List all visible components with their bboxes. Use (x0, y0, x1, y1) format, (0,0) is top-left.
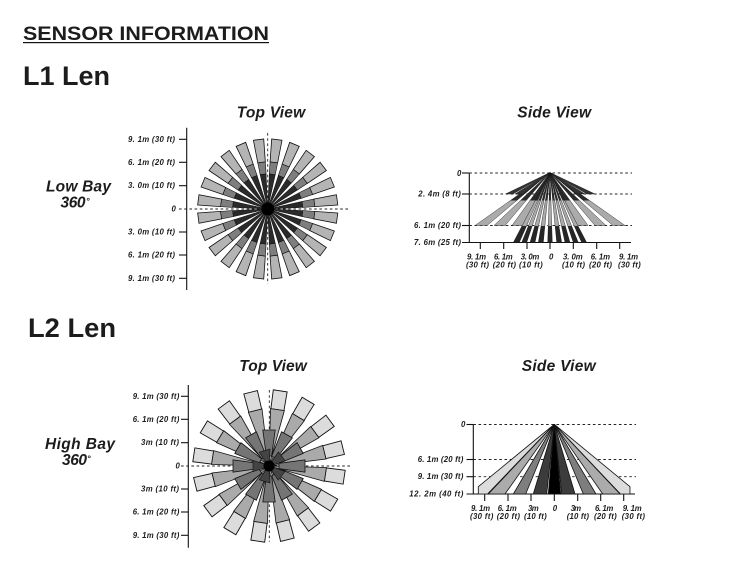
detection pattern: L2 top rays (193, 390, 345, 542)
axis: L1 side view scale: 3. 0m (563, 252, 583, 262)
axis: L1 side view scale: 9. 1m (619, 252, 638, 262)
axis: L1 side view scale: (10 ft) (562, 261, 585, 270)
axis: L2 side view scale (409, 420, 645, 521)
heading: L1 side view: Side View (517, 104, 592, 121)
axis: L1 side view scale: 2. 4m (8 ft) (417, 190, 461, 198)
axis: L1 side view scale: 7. 6m (25 ft) (414, 238, 461, 247)
axis: L2 top view scale: 3m (10 ft) (141, 438, 179, 447)
axis: L1 side view scale: (30 ft) (466, 261, 489, 270)
chart: L1 top view (128, 128, 349, 290)
axis: L1 side view scale: 6. 1m (494, 252, 513, 262)
axis: L2 top view scale: 3m (10 ft) (141, 484, 179, 494)
axis: L1 top view scale: 6. 1m (20 ft) (128, 158, 175, 167)
axis: L1 side view scale: (20 ft) (589, 261, 612, 270)
axis: L2 top view scale: 9. 1m (30 ft) (133, 392, 180, 401)
axis: L2 top view scale: 0 (176, 462, 180, 470)
label: High Bay 360 (45, 436, 116, 469)
axis: L2 side view scale: (10 ft) (524, 512, 547, 521)
chart: L2 side view (409, 420, 645, 521)
axis: L2 side view scale: 6. 1m (595, 504, 613, 513)
axis: L2 top view scale: 6. 1m (20 ft) (133, 415, 180, 424)
detection pattern: L1 top rays (198, 139, 338, 279)
axis: L2 side view scale: (30 ft) (470, 512, 494, 521)
label: Low Bay 360: ° (86, 196, 90, 206)
heading: L1 top view: Top View (237, 104, 306, 121)
axis: L2 side view scale: 9. 1m (471, 504, 490, 513)
axis: L1 top view scale (128, 128, 349, 290)
label: Low Bay 360 (46, 178, 112, 212)
heading: L2 Len: L2 Len (28, 313, 116, 343)
axis: L1 side view scale: 9. 1m (467, 252, 486, 262)
axis: L2 side view scale: 0 (553, 504, 558, 513)
heading: L1 Len: L1 Len (23, 61, 110, 91)
axis: L2 side view scale: 12. 2m (40 ft) (409, 489, 464, 498)
axis: L2 side view scale: 6. 1m (20 ft) (418, 455, 464, 464)
axis: L1 top view scale: 9. 1m (30 ft) (128, 135, 175, 144)
axis: L1 top view scale: 6. 1m (20 ft) (128, 250, 175, 260)
axis: L1 top view scale: 3. 0m (10 ft) (128, 181, 175, 190)
axis: L2 side view scale: 9. 1m (623, 504, 642, 513)
chart: L2 top view (133, 385, 352, 548)
label: Low Bay 360: Low Bay (46, 178, 112, 196)
axis: L1 side view scale: 6. 1m (20 ft) (414, 221, 461, 230)
axis: L2 top view scale (133, 385, 352, 548)
axis: L2 side view scale: (20 ft) (497, 512, 520, 521)
axis: L2 top view scale: 6. 1m (20 ft) (133, 508, 180, 516)
axis: L1 side view scale: (30 ft) (618, 261, 641, 270)
heading: L2 side view: Side View (522, 358, 597, 375)
label: High Bay 360: High Bay (45, 436, 116, 453)
label: High Bay 360: 360 (62, 452, 87, 469)
chart: L1 side view (414, 169, 641, 270)
axis: L1 side view scale: (20 ft) (493, 261, 516, 270)
axis: L1 top view scale: 0 (172, 204, 176, 214)
axis: L1 side view scale: 6. 1m (591, 252, 610, 262)
axis: L2 side view scale: (30 ft) (622, 512, 645, 521)
label: High Bay 360: ° (87, 454, 91, 464)
axis: L1 side view scale: 0 (457, 169, 462, 178)
title: sensor information: SENSOR INFORMATION (23, 23, 269, 45)
axis: L1 top view scale: 3. 0m (10 ft) (128, 228, 175, 236)
axis: L2 side view scale: 6. 1m (498, 504, 517, 513)
detection pattern: L1 side rays (475, 172, 625, 242)
axis: L1 side view scale: 3. 0m (521, 252, 539, 262)
axis: L2 side view scale: (10 ft) (567, 512, 589, 521)
axis: L2 side view scale: 3m (528, 504, 539, 513)
axis: L2 side view scale: 9. 1m (30 ft) (418, 472, 464, 481)
axis: L1 side view scale: 0 (549, 252, 554, 262)
axis: L2 side view scale: (20 ft) (594, 512, 617, 521)
label: Low Bay 360: 360 (60, 194, 86, 212)
axis: L1 top view scale: 9. 1m (30 ft) (128, 274, 175, 283)
axis: L1 side view scale (414, 169, 641, 270)
axis: L1 side view scale: (10 ft) (519, 261, 543, 270)
heading: L2 top view: Top View (239, 358, 308, 375)
detection pattern: L2 side rays (478, 424, 630, 494)
axis: L2 side view scale: 0 (461, 420, 466, 429)
axis: L2 side view scale: 3m (571, 504, 581, 513)
axis: L2 top view scale: 9. 1m (30 ft) (133, 531, 180, 540)
